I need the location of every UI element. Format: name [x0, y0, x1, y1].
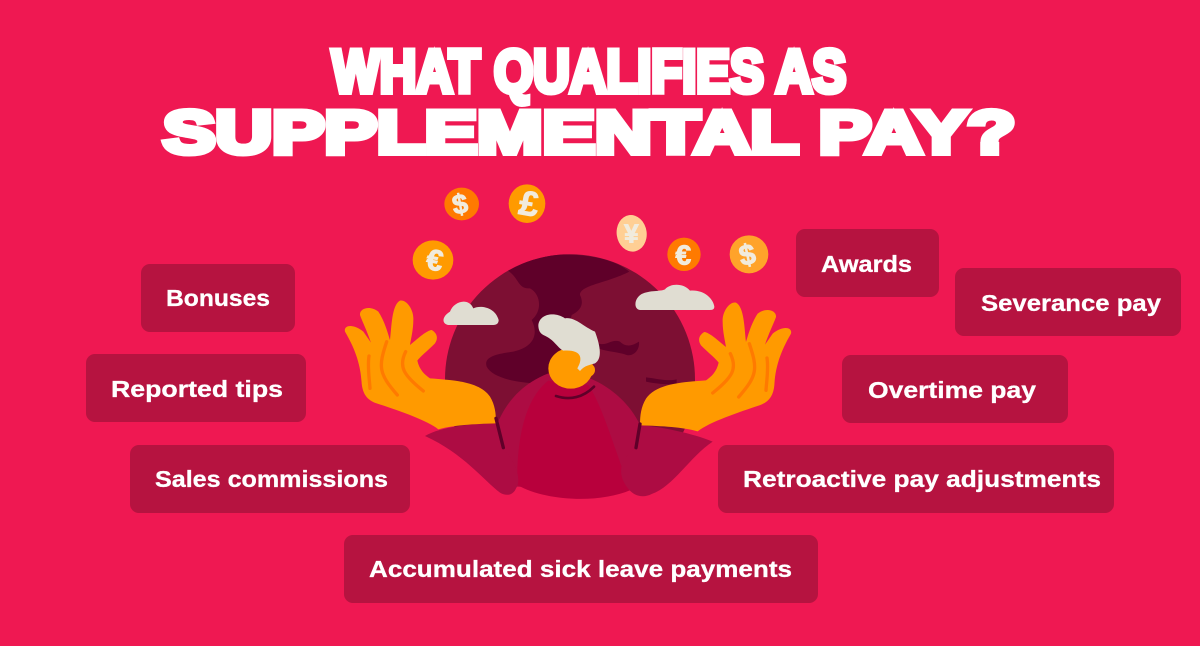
coin: dollar right: $: [736, 238, 759, 273]
coin: euro right: [667, 238, 701, 271]
coin: pound: £: [516, 184, 542, 225]
coin: yen: [614, 213, 649, 254]
label: Overtime pay: [842, 355, 1068, 423]
shirt: [517, 381, 631, 499]
label: Sales commissions: Sales commissions: [155, 466, 388, 492]
title: [163, 38, 1015, 166]
head: [548, 348, 595, 389]
label: Overtime pay: Overtime pay: [868, 377, 1036, 403]
coin: dollar: $: [450, 187, 470, 221]
label: Bonuses: Bonuses: [166, 285, 270, 311]
coin: pound: [509, 184, 545, 225]
coins: [413, 184, 768, 280]
right sleeve: [621, 425, 713, 496]
coin: yen: ¥: [624, 219, 639, 249]
coin: euro left: €: [424, 243, 446, 278]
left sleeve: [425, 423, 518, 495]
illustration: globe, person, hands and coins: [345, 184, 791, 499]
coin: dollar right: [730, 235, 768, 273]
label: Severance pay: [955, 268, 1181, 336]
left cloud: [444, 302, 499, 325]
coin: euro left: [413, 240, 453, 280]
globe: [445, 254, 695, 432]
label: Sales commissions: [130, 445, 410, 513]
left hand: [345, 301, 496, 429]
title: SUPPLEMENTAL PAY?: [163, 99, 1015, 166]
right hand: [640, 303, 791, 431]
label: Awards: [796, 229, 939, 297]
coin: euro right: €: [676, 239, 692, 270]
label: Reported tips: Reported tips: [111, 376, 283, 402]
label: Retroactive pay adjustments: Retroactive pay adjustments: [743, 466, 1101, 492]
hair: [538, 314, 600, 371]
label: Bonuses: [141, 264, 295, 332]
label: Accumulated sick leave payments: Accumulated sick leave payments: [369, 556, 792, 582]
title: WHAT QUALIFIES AS: [332, 38, 846, 105]
robe: [496, 373, 640, 490]
label: Severance pay: Severance pay: [981, 290, 1161, 316]
sleeve seams and collar: [496, 387, 640, 448]
label: Accumulated sick leave payments: [344, 535, 818, 603]
label: Retroactive pay adjustments: [718, 445, 1114, 513]
right cloud: [635, 285, 714, 310]
label: Reported tips: [86, 354, 306, 422]
label: Awards: Awards: [821, 251, 912, 277]
coin: dollar: [444, 187, 479, 221]
